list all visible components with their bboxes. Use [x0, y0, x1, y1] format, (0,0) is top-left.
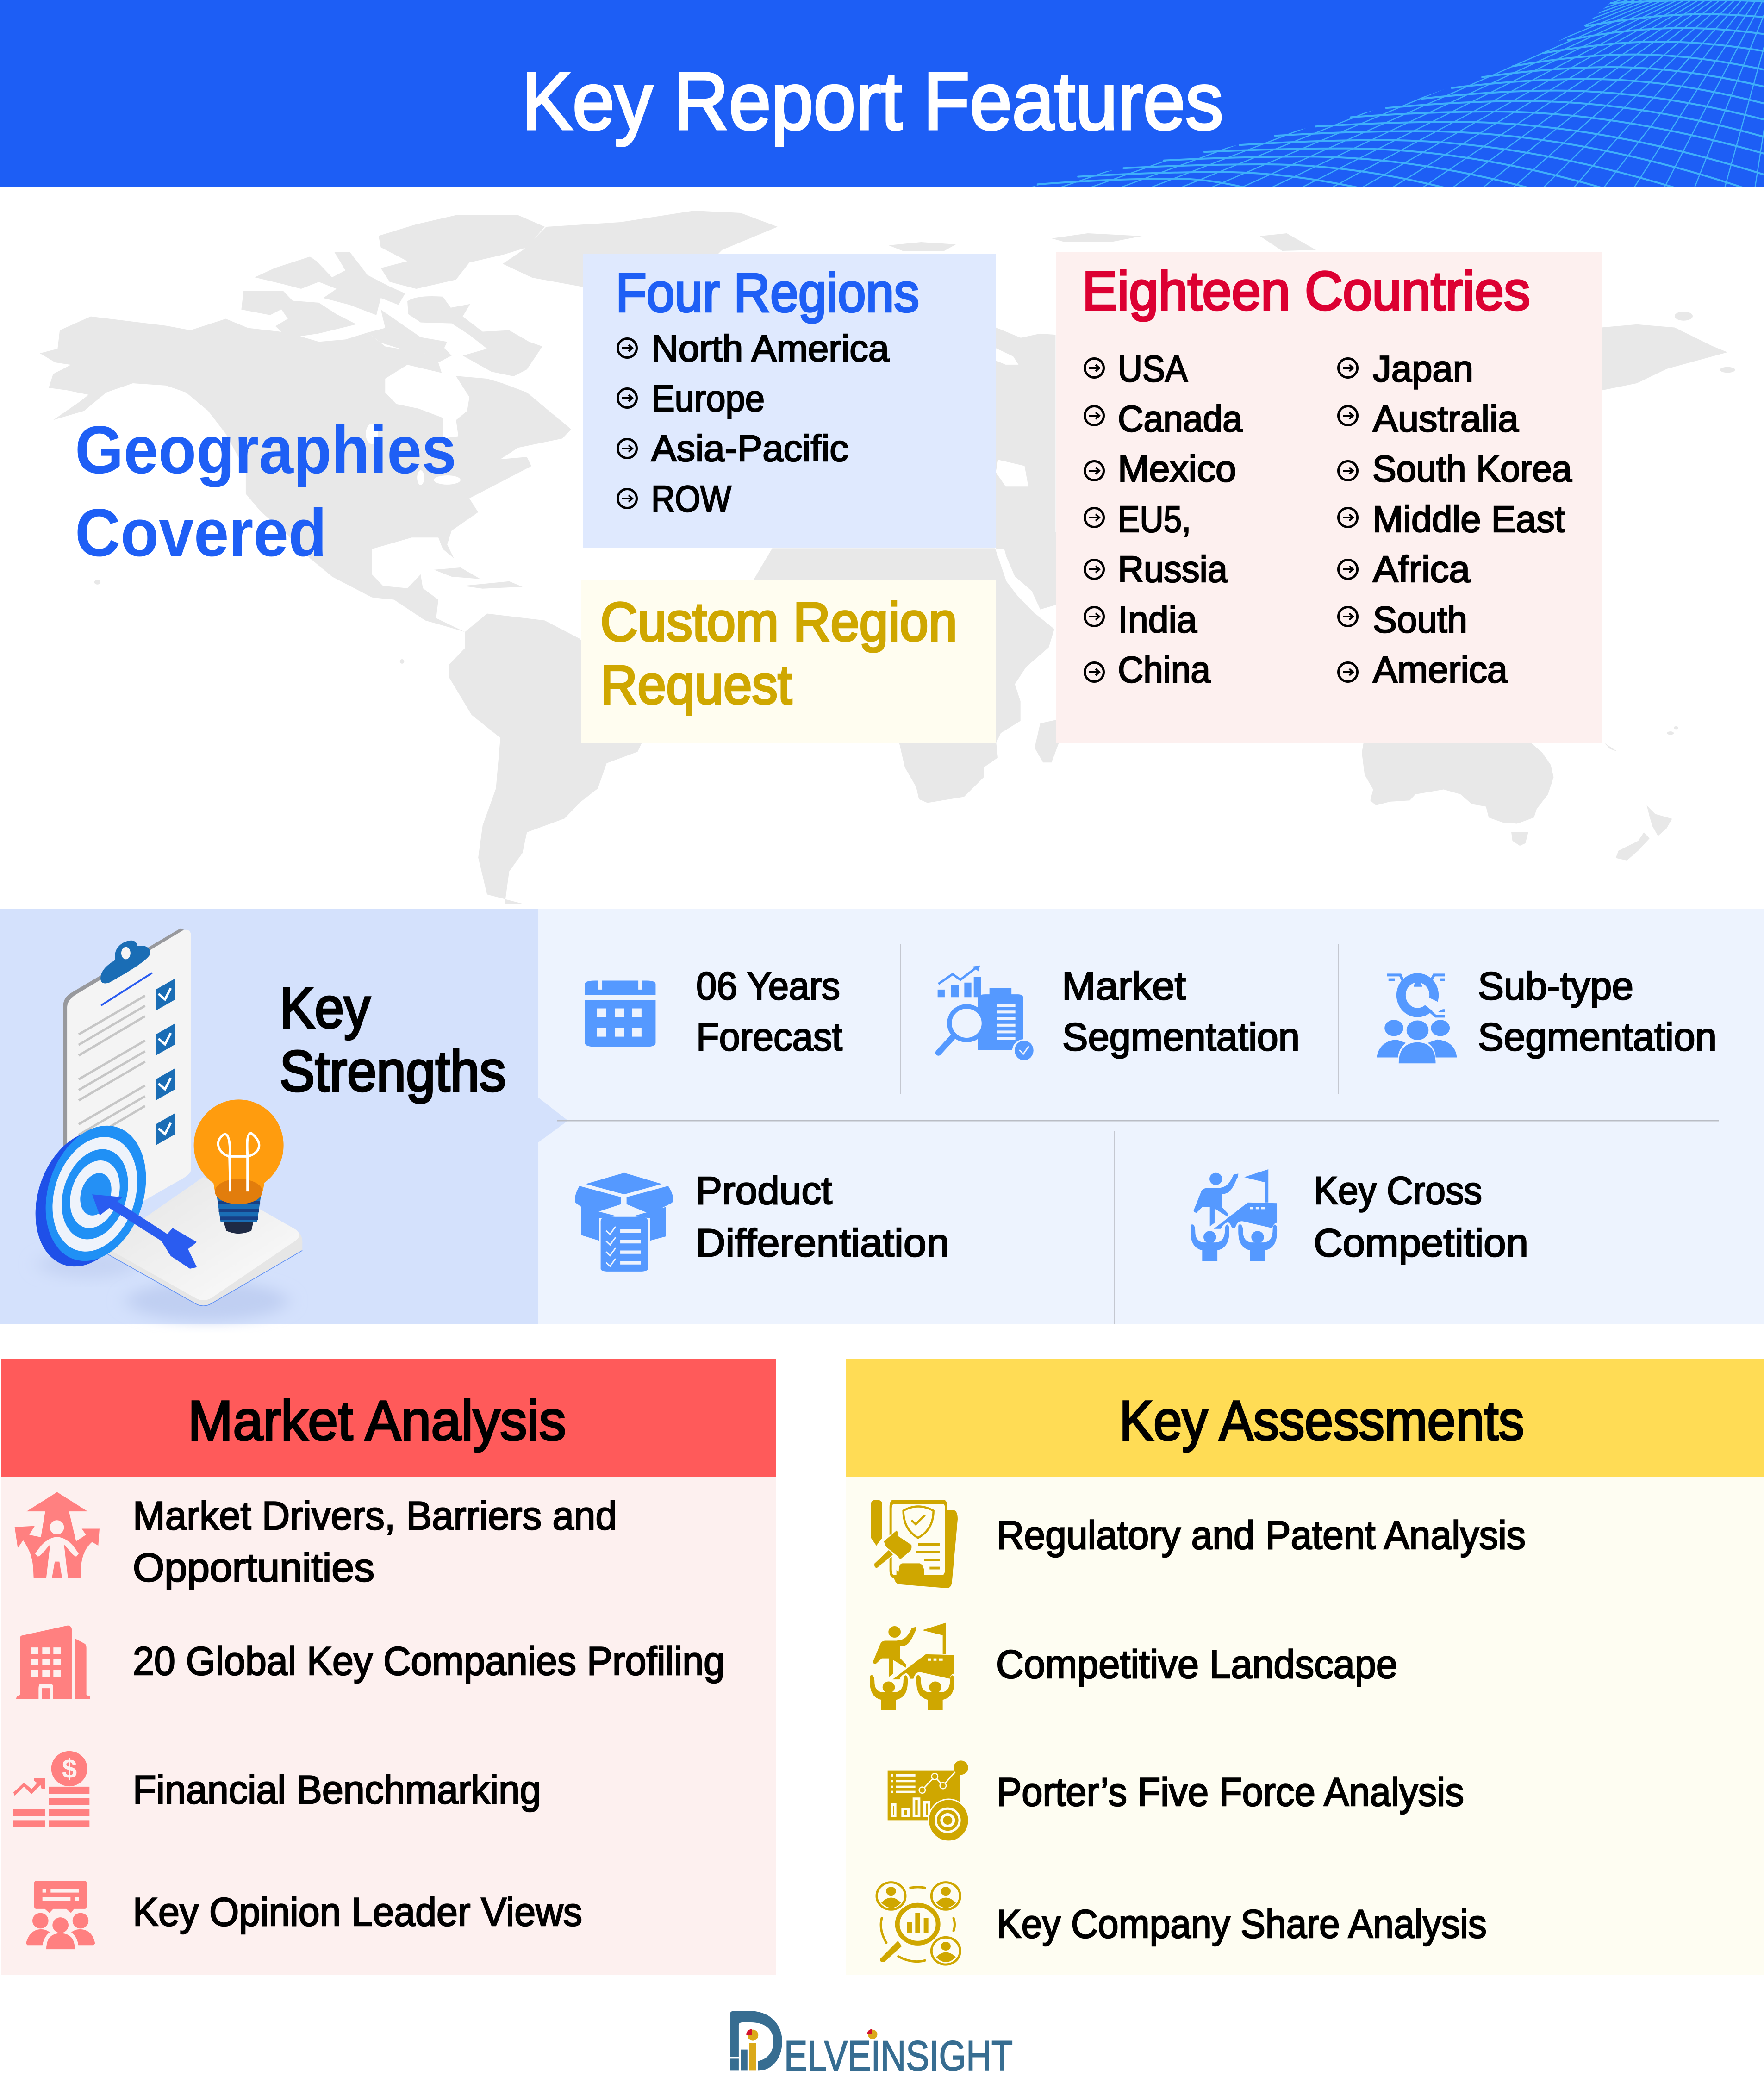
illustration: clipboard target and bulb	[38, 929, 302, 1321]
heading: Custom Region Request: Request	[600, 655, 792, 716]
wave mesh decoration	[1028, 0, 1764, 188]
heading: Key Strengths: Key	[280, 976, 370, 1040]
panel: key assessments	[846, 1359, 1764, 1975]
world map background	[40, 211, 1735, 904]
list: countries column one: EU5,	[1118, 499, 1191, 540]
icon: dollar coin and stacks	[13, 1751, 89, 1827]
item: sub-type segmentation	[1377, 964, 1717, 1063]
item: key cross competition: Competition	[1314, 1221, 1528, 1265]
list: countries column one	[1085, 348, 1242, 690]
icon: box and checklist	[575, 1173, 673, 1272]
item: global companies	[16, 1626, 725, 1699]
item: key company share analysis: Key Company Share Analysis	[997, 1902, 1487, 1946]
panel: key strengths	[0, 909, 1764, 1324]
Arctic islands	[889, 242, 956, 251]
list: countries column two: Australia	[1373, 398, 1519, 439]
item: market segmentation: Market	[1062, 964, 1186, 1008]
panel: four regions	[583, 254, 996, 548]
logo mark	[730, 2011, 877, 2070]
icon: people with speech bubble	[26, 1881, 95, 1949]
item: 06 years forecast: Forecast	[696, 1015, 842, 1059]
item: 06 years forecast	[585, 964, 842, 1059]
heading: Custom Region Request	[600, 592, 957, 716]
item: market drivers	[15, 1492, 617, 1590]
heading: Geographies Covered: Geographies	[75, 412, 456, 487]
item: porters five force analysis	[888, 1760, 1464, 1842]
item: 06 years forecast: 06 Years	[696, 964, 840, 1008]
heading: Key Assessments: Key Assessments	[1119, 1389, 1524, 1452]
item: market segmentation	[938, 964, 1300, 1062]
heading: Market Analysis: Market Analysis	[188, 1389, 566, 1452]
item: key opinion leader views: Key Opinion Leader Views	[133, 1890, 582, 1934]
list: regions: Asia-Pacific	[651, 428, 848, 469]
item: regulatory and patent analysis: Regulatory and Patent Analysis	[997, 1513, 1526, 1558]
list: regions: Europe	[651, 378, 765, 419]
list: countries column two: Japan	[1373, 348, 1473, 389]
heading: Geographies Covered: Covered	[75, 495, 327, 570]
heading: Key Strengths	[280, 976, 506, 1104]
list: countries column one: India	[1118, 599, 1197, 640]
heading: Custom Region Request: Custom Region	[600, 592, 957, 653]
icon: magnifier and users	[877, 1883, 960, 1964]
item: market segmentation: Segmentation	[1062, 1015, 1300, 1059]
list: countries column one: Canada	[1118, 398, 1242, 439]
item: financial benchmarking	[13, 1751, 541, 1827]
Americas	[40, 215, 642, 904]
heading: Key Strengths: Strengths	[280, 1040, 506, 1104]
icon: climber with flag	[1191, 1169, 1277, 1261]
item: market drivers: Market Drivers, Barriers and	[133, 1494, 617, 1538]
heading: Four Regions: Four Regions	[616, 262, 919, 324]
list: countries column one: USA	[1118, 348, 1188, 389]
list: countries column two: South	[1373, 599, 1467, 640]
list: regions: ROW	[651, 478, 731, 519]
list: countries column two: South Korea	[1372, 448, 1572, 489]
item: key opinion leader views	[26, 1881, 582, 1949]
list: countries column one: China	[1118, 649, 1210, 690]
icon: person with arrows	[15, 1492, 100, 1578]
item: regulatory and patent analysis	[871, 1500, 1526, 1588]
logo: DelveInsight	[730, 2011, 1013, 2080]
icon: calendar	[585, 980, 655, 1047]
list: countries column one: Russia	[1118, 549, 1228, 590]
Africa Arabia Australia	[754, 532, 1678, 861]
list: countries column two: America	[1373, 649, 1508, 690]
heading: Geographies Covered	[75, 412, 456, 570]
list: countries column two: Middle East	[1372, 499, 1565, 540]
panel: custom region request	[581, 580, 996, 743]
item: sub-type segmentation: Sub-type	[1478, 964, 1633, 1008]
item: competitive landscape: Competitive Landscape	[996, 1642, 1397, 1687]
item: porters five force analysis: Porter’s Five Force Analysis	[997, 1770, 1464, 1815]
Greenland	[503, 211, 778, 370]
item: financial benchmarking: Financial Benchmarking	[133, 1768, 541, 1812]
list: countries column two: Africa	[1373, 549, 1471, 590]
icon: donut and people	[1377, 973, 1457, 1063]
list: countries column two	[1339, 348, 1572, 690]
icon: office building	[16, 1626, 90, 1699]
Eurasia between panels	[996, 312, 1735, 549]
item: key cross competition	[1191, 1169, 1528, 1265]
icon: dollar coin and stacks: $	[62, 1754, 77, 1784]
item: product differentiation: Differentiation	[696, 1221, 949, 1265]
list: regions: North America	[651, 328, 890, 369]
icon: magnifier and clipboard	[938, 966, 1036, 1062]
list: regions	[617, 328, 890, 519]
item: key company share analysis	[877, 1883, 1487, 1964]
item: market drivers: Opportunities	[133, 1546, 374, 1590]
item: global companies: 20 Global Key Companies Profiling	[133, 1639, 725, 1684]
item: product differentiation	[575, 1169, 949, 1272]
title: Key Report Features	[522, 56, 1223, 147]
heading: Eighteen Countries: Eighteen Countries	[1082, 261, 1530, 322]
item: competitive landscape	[870, 1623, 1397, 1710]
panel: eighteen countries	[1056, 252, 1602, 743]
item: sub-type segmentation: Segmentation	[1478, 1015, 1717, 1059]
header banner	[0, 0, 1764, 188]
icon: climber with flag	[870, 1623, 954, 1710]
logo: DelveInsight: ELVEINSIGHT	[784, 2033, 1013, 2080]
item: product differentiation: Product	[696, 1169, 832, 1212]
icon: document and gavel	[871, 1500, 958, 1588]
icon: dashboard and target	[888, 1760, 969, 1842]
item: key cross competition: Key Cross	[1314, 1169, 1482, 1212]
list: countries column one: Mexico	[1118, 448, 1236, 489]
panel: market analysis	[1, 1359, 776, 1975]
